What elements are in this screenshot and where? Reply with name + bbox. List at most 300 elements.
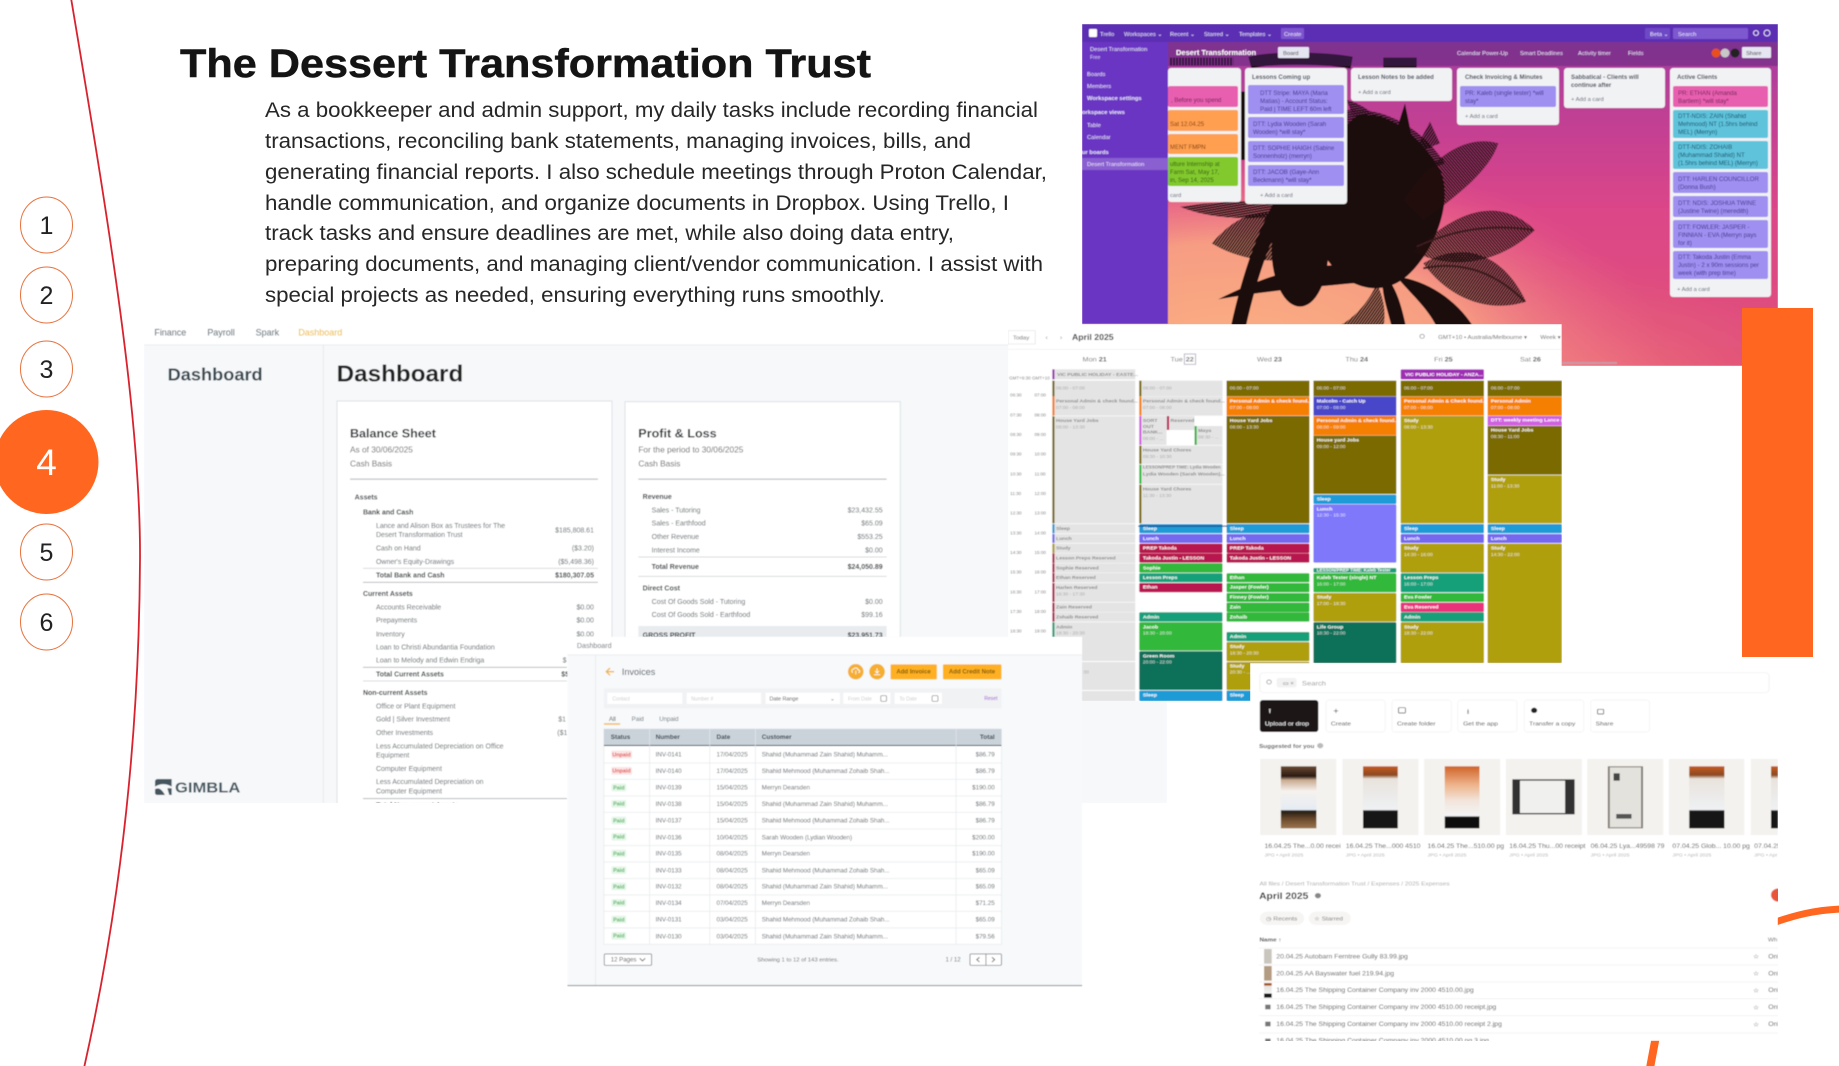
Tuesday column: 09:30 - 10:30 xyxy=(1143,454,1172,459)
Saturday column: Study xyxy=(1491,477,1506,483)
card: balance sheet: Total Bank and Cash xyxy=(376,573,445,580)
Wednesday column: Zohaib xyxy=(1230,614,1247,620)
Tuesday column: Sophie xyxy=(1143,565,1161,571)
list: partial cards: MENT FMPN xyxy=(1170,145,1206,151)
Thursday column: 12:30 - 15:30 xyxy=(1317,513,1346,518)
step 5 xyxy=(20,524,72,580)
dropbox background xyxy=(1250,663,1778,1041)
Thursday column: Kaleb Tester (single) NT xyxy=(1317,575,1377,581)
panel: calendar screenshot xyxy=(1008,324,1565,701)
thumbnail captions xyxy=(1264,843,1781,858)
action buttons: Upload or drop xyxy=(1265,721,1310,728)
list: Sabbatical xyxy=(1564,68,1665,108)
Saturday column: 11:00 - 13:30 xyxy=(1491,483,1520,488)
invoices table: Shahid (Muhammad Zain Shahid) Muhamm... xyxy=(762,801,888,808)
step 5: 5 xyxy=(40,539,53,567)
Thursday column: 08:00 - 09:00 xyxy=(1317,425,1346,429)
invoices table: Date xyxy=(716,734,731,741)
weekday headers: 22 xyxy=(1186,357,1194,363)
card: balance sheet: Total Non-current Assets xyxy=(376,802,459,809)
list: Check Invoicing and Minutes: PR: Kaleb (single tester) *will xyxy=(1465,90,1544,97)
time axis: 17:00 xyxy=(1035,589,1046,594)
Saturday column xyxy=(1488,381,1565,663)
calendar background xyxy=(1008,324,1562,701)
suggested for you heading: Suggested for you xyxy=(1259,744,1315,750)
Tuesday column: House Yard Chores xyxy=(1143,487,1192,493)
card: balance sheet: Gold | Silver Investment xyxy=(376,717,450,724)
Tuesday column xyxy=(1139,381,1225,701)
top navigation bar: Starred ⌄ xyxy=(1204,32,1229,38)
invoices table: Number xyxy=(656,734,680,741)
palm tree silhouette xyxy=(1170,59,1535,327)
list: Sabbatical: + Add a card xyxy=(1571,97,1604,103)
time axis: 19:00 xyxy=(1035,629,1046,634)
Friday column: 18:30 - 22:00 xyxy=(1404,631,1433,636)
workspace sidebar: Workspace settings xyxy=(1087,96,1142,102)
time axis: 07:00 xyxy=(1035,393,1046,398)
invoices background xyxy=(567,637,1082,986)
file rows: 16.04.25 The Shipping Container Company inv 2000 4510.00 receipt.jpg xyxy=(1276,1004,1497,1011)
filter bar: ⌄ xyxy=(830,696,835,702)
list: Active Clients: DTT: NDIS: JOSHUA TWINE xyxy=(1678,200,1756,207)
Thursday column: 09:00 - 12:00 xyxy=(1317,444,1346,449)
Saturday column: Personal Admin xyxy=(1491,399,1531,404)
Tuesday column: 08:30 - ... xyxy=(1198,434,1219,439)
time axis: GMT+10 xyxy=(1032,376,1050,380)
Thursday column: Malcolm - Catch Up xyxy=(1317,399,1366,404)
invoices table: $86.79 xyxy=(976,768,995,775)
table header xyxy=(1259,938,1777,943)
top navigation tabs: Dashboard xyxy=(298,328,342,338)
list: Lessons Coming up: DTT Stripe: MAYA (Maria xyxy=(1260,90,1328,97)
Thursday column xyxy=(1313,381,1399,663)
list: Lessons Coming up: + Add a card xyxy=(1260,193,1293,199)
invoices table: Shahid (Muhammad Zain Shahid) Muhamm... xyxy=(762,933,888,940)
list: Lesson Notes to be added: Lesson Notes to be added xyxy=(1358,74,1434,81)
top navigation tabs: Spark xyxy=(256,328,280,338)
orange accent rectangle xyxy=(1742,308,1813,657)
Thursday column: House yard Jobs xyxy=(1317,438,1359,444)
Thursday column: Study xyxy=(1317,595,1332,601)
invoices table: $200.00 xyxy=(972,834,995,841)
filter bar: From Date xyxy=(848,696,872,702)
Monday column: Lesson Preps Reserved xyxy=(1056,555,1116,561)
invoices table: Merryn Dearsden xyxy=(762,851,810,858)
description text block: track tasks and ensure deadlines are met, while also doing data entry, xyxy=(265,221,954,245)
Friday column: Lunch xyxy=(1404,536,1420,542)
list: Active Clients: FINNIAN - EVA (Merryn pays xyxy=(1678,232,1756,239)
invoices table: INV-0130 xyxy=(656,933,682,940)
Thursday column: Lunch xyxy=(1317,506,1332,512)
invoices table: Paid xyxy=(613,884,625,890)
Wednesday column: House Yard Jobs xyxy=(1230,418,1273,424)
Friday column xyxy=(1401,369,1487,663)
Monday column: Sophie Reserved xyxy=(1056,565,1099,571)
invoices table: INV-0141 xyxy=(656,752,682,759)
search bar: Search xyxy=(1302,680,1326,688)
card: profit and loss: GROSS PROFIT xyxy=(643,632,696,639)
invoices table: Shahid (Muhammad Zain Shahid) Muhamm... xyxy=(762,752,888,759)
Tuesday column: Lydia Wooden (Sarah Wooden)... xyxy=(1143,472,1225,478)
board header bar: Fields xyxy=(1628,51,1644,57)
filter bar: Date Range xyxy=(770,696,798,702)
step 1 xyxy=(20,197,72,253)
top navigation bar: Templates ⌄ xyxy=(1239,32,1272,38)
list: Active Clients: (Muhammad Shahid) NT xyxy=(1678,152,1745,159)
Tuesday column: Lesson Preps xyxy=(1143,575,1178,581)
file rows: 20.04.25 Autobarn Ferntree Gully 83.99.jpg xyxy=(1276,954,1408,960)
thumbnail captions: 16.04.25 The...0.00 recei xyxy=(1264,843,1341,850)
thumbnail captions: JPG • Apr xyxy=(1754,853,1778,858)
Tuesday column: Takoda Justin - LESSON xyxy=(1143,555,1205,561)
decorative orange ring segments xyxy=(1650,909,1839,1066)
Tuesday column: 18:30 - 20:00 xyxy=(1143,631,1172,636)
card: balance sheet: $ xyxy=(563,658,567,665)
card: profit and loss: Cost Of Goods Sold - Tutoring xyxy=(652,599,745,606)
workspace sidebar: Desert Transformation xyxy=(1090,47,1147,53)
Monday column: House Yard Jobs xyxy=(1056,418,1099,424)
Thursday column: Sleep xyxy=(1317,496,1331,502)
invoices table: Unpaid xyxy=(612,769,631,775)
Monday column: VIC PUBLIC HOLIDAY - EASTE... xyxy=(1057,372,1139,378)
thumbnail captions: 16.04.25 The...000 4510 xyxy=(1346,843,1421,850)
Wednesday column: 18:30 - 20:30 xyxy=(1230,650,1259,655)
thumbnail captions: 16.04.25 The...510.00 pg xyxy=(1428,843,1505,850)
invoices table: 08/04/2025 xyxy=(716,884,748,891)
Monday column: Zain Reserved xyxy=(1056,605,1092,611)
Thursday column: Personal Admin & check found... xyxy=(1317,418,1399,424)
card: balance sheet: Office or Plant Equipment xyxy=(376,703,455,710)
invoices table: Shahid Mehmood (Muhammad Zohaib Shah... xyxy=(762,818,890,825)
list: partial cards: ulture Internship at xyxy=(1170,162,1220,168)
filter bar: Reset xyxy=(984,696,998,702)
invoices table: 17/04/2025 xyxy=(716,768,748,775)
Tuesday column: LESSON/PREP TIME: Lydia Wooden xyxy=(1143,465,1221,470)
card: balance sheet: Equipment xyxy=(376,753,409,760)
card: balance sheet: Bank and Cash xyxy=(363,510,413,517)
invoices table: Paid xyxy=(613,917,625,923)
invoices table: Status xyxy=(611,734,631,741)
calendar toolbar: › xyxy=(1060,335,1062,341)
time axis: 12:00 xyxy=(1035,491,1046,496)
workspace sidebar: Table xyxy=(1087,123,1101,129)
Wednesday column: 06:00 - 07:00 xyxy=(1230,386,1259,390)
card: balance sheet: $0.00 xyxy=(576,631,594,638)
filter pills: ☆ Starred xyxy=(1314,916,1343,922)
Thursday column: 06:00 - 07:00 xyxy=(1317,386,1346,390)
step 4 active: 4 xyxy=(36,442,57,483)
action buttons: Share xyxy=(1596,721,1614,728)
list: Active Clients: DTT-NDIS: ZOHAIB xyxy=(1678,144,1732,151)
action buttons: Create xyxy=(1331,721,1352,728)
top navigation bar: Beta ⌄ xyxy=(1650,32,1668,38)
file rows: ☆ xyxy=(1753,971,1759,978)
invoices table: Paid xyxy=(613,868,625,874)
Monday column xyxy=(1052,369,1139,701)
invoices table: Total xyxy=(980,734,995,741)
card: balance sheet: Computer Equipment xyxy=(376,788,442,795)
invoices heading and action buttons: Add Credit Note xyxy=(949,670,996,676)
Saturday column: 08:30 - 11:00 xyxy=(1491,434,1520,439)
Monday column: Study xyxy=(1056,546,1071,552)
top navigation tabs: Finance xyxy=(154,328,186,338)
weekday headers: Tue xyxy=(1171,357,1183,363)
invoices table: INV-0132 xyxy=(656,884,682,891)
list: Lessons Coming up: DTT: JACOB (Gaye-Ann xyxy=(1253,169,1319,176)
Monday column: Lunch xyxy=(1056,536,1072,542)
time axis: 15:30 xyxy=(1010,570,1022,575)
list: Lessons Coming up: Paid | TIME LEFT 60m left xyxy=(1260,106,1332,113)
invoices table: $190.00 xyxy=(972,785,995,792)
filter pills: ◷ Recents xyxy=(1266,916,1297,922)
card: profit and loss: $23,432.55 xyxy=(848,507,883,514)
Tuesday column: PREP Takoda xyxy=(1143,546,1177,552)
description text block: preparing documents, and managing client/vendor communication. I assist with xyxy=(265,252,1043,276)
list: Active Clients: MEL) (Merryn) xyxy=(1678,129,1717,136)
thumbnail captions: JPG • April 2025 xyxy=(1264,853,1304,858)
Friday column: Lesson Preps xyxy=(1404,575,1439,581)
invoices table: INV-0133 xyxy=(656,867,682,874)
card: balance sheet: $0.00 xyxy=(576,604,594,611)
Saturday column: Lunch xyxy=(1491,536,1507,542)
Friday column: Study xyxy=(1404,624,1419,630)
invoices heading and action buttons: Add Invoice xyxy=(896,670,931,676)
board header bar: Activity timer xyxy=(1578,51,1611,57)
Tuesday column: BANK... xyxy=(1143,430,1163,436)
invoices table: $65.09 xyxy=(976,867,995,874)
invoices table: INV-0134 xyxy=(656,900,682,907)
card: profit and loss: Sales - Tutoring xyxy=(652,507,701,514)
folder title: April 2025 xyxy=(1259,892,1309,902)
list: Active Clients: + Add a card xyxy=(1677,287,1710,293)
card: profit and loss: Sales - Earthfood xyxy=(652,521,706,528)
Wednesday column: Finney (Fowler) xyxy=(1230,595,1269,601)
step 4 active xyxy=(0,410,98,514)
Thursday column: 07:00 - 08:00 xyxy=(1317,405,1346,410)
table header: Name ↑ xyxy=(1259,938,1282,943)
file browser list xyxy=(1259,881,1786,1045)
file rows: Onl xyxy=(1768,1021,1779,1028)
Saturday column: 14:30 - 22:00 xyxy=(1491,552,1520,557)
list: partial cards: , Before you spend xyxy=(1171,98,1221,104)
step navigation circles xyxy=(0,197,98,650)
card: balance sheet: Loan to Melody and Edwin Endriga xyxy=(376,658,484,665)
workspace sidebar xyxy=(1082,42,1168,324)
list: Lessons Coming up: Matias) - Account Status: xyxy=(1260,98,1328,105)
time axis: GMT+9:30 xyxy=(1009,376,1031,380)
card: profit and loss: Revenue xyxy=(643,494,672,501)
time axis: 18:30 xyxy=(1010,629,1022,634)
time axis: 13:00 xyxy=(1035,511,1046,516)
calendar toolbar xyxy=(1008,330,1561,344)
Tuesday column: Personal Admin & check found... xyxy=(1143,399,1225,404)
card: profit and loss: $553.25 xyxy=(857,534,883,541)
card: profit and loss: Profit & Loss xyxy=(638,427,717,441)
panel: Trello board screenshot xyxy=(1082,24,1778,366)
status tabs: Unpaid xyxy=(659,717,678,723)
card: balance sheet: Other Investments xyxy=(376,730,434,737)
workspace sidebar: Calendar xyxy=(1087,135,1111,141)
board header bar: Desert Transformation xyxy=(1176,48,1256,57)
card: balance sheet: Accounts Receivable xyxy=(376,604,441,611)
Wednesday column: Sleep xyxy=(1230,693,1244,699)
card: balance sheet: Inventory xyxy=(376,631,405,638)
top navigation bar: Recent ⌄ xyxy=(1170,32,1195,38)
weekday headers: Thu 24 xyxy=(1345,357,1368,363)
calendar toolbar: GMT+10 • Australia/Melbourne ▾ xyxy=(1438,335,1527,341)
Thursday column: Life Group xyxy=(1317,624,1343,630)
card: profit and loss: Direct Cost xyxy=(643,585,681,592)
invoices heading and action buttons: Invoices xyxy=(622,667,656,677)
invoices table: Paid xyxy=(613,802,625,808)
card: profit and loss xyxy=(625,402,900,639)
action buttons: Create folder xyxy=(1397,721,1436,728)
Wednesday column: PREP Takoda xyxy=(1230,546,1264,552)
calendar toolbar: April 2025 xyxy=(1072,332,1114,342)
invoices table: 15/04/2025 xyxy=(716,818,748,825)
file rows: Onl xyxy=(1768,987,1779,994)
weekday headers: Wed 23 xyxy=(1257,357,1282,363)
Friday column: Study xyxy=(1404,418,1419,424)
invoices heading and action buttons xyxy=(606,664,1001,679)
title: The Dessert Transformation Trust xyxy=(180,42,871,86)
card: balance sheet: Owner's Equity-Drawings xyxy=(376,559,455,566)
Tuesday column: Maya xyxy=(1198,428,1212,434)
Wednesday column: Admin xyxy=(1230,634,1246,640)
Monday column: Sleep xyxy=(1056,526,1070,532)
step 3 xyxy=(20,341,72,397)
Monday column: Harlen Reserved xyxy=(1056,585,1098,591)
search bar: ▭ × xyxy=(1283,681,1294,687)
card: profit and loss: Other Revenue xyxy=(652,534,699,541)
invoices table: $86.79 xyxy=(976,818,995,825)
card: balance sheet: Current Assets xyxy=(363,591,413,598)
invoices table: Paid xyxy=(613,835,625,841)
card: balance sheet: Loan to Christi Abundantia Foundation xyxy=(376,644,495,651)
calendar toolbar: Week ▾ xyxy=(1540,335,1561,341)
Monday column: 18:30 - 20:30 xyxy=(1056,631,1085,636)
Saturday column: 06:00 - 07:00 xyxy=(1491,386,1520,390)
invoices table: INV-0139 xyxy=(656,785,682,792)
file rows: 20.04.25 AA Bayswater fuel 219.94.jpg xyxy=(1276,971,1395,977)
invoices table: $65.09 xyxy=(976,917,995,924)
description text block: handle communication, and organize documents in Dropbox. Using Trello, I xyxy=(265,191,1009,215)
search bar xyxy=(1266,678,1326,687)
board header bar: Calendar Power-Up xyxy=(1457,51,1508,57)
list: Lesson Notes to be added xyxy=(1351,68,1452,101)
list: Active Clients: Bartlem) *will stay* xyxy=(1678,98,1729,105)
list: Active Clients: week (with prep time) xyxy=(1677,270,1736,277)
filter bar xyxy=(604,688,1001,708)
file rows: ☆ xyxy=(1753,954,1759,961)
main dashboard heading: Dashboard xyxy=(337,361,463,387)
time axis: 10:00 xyxy=(1035,452,1046,457)
Tuesday column: 08:00 - ... xyxy=(1143,436,1164,441)
invoices table: Shahid Mehmood (Muhammad Zohaib Shah... xyxy=(762,768,890,775)
invoices table: 03/04/2025 xyxy=(716,933,748,940)
invoices table: Paid xyxy=(613,934,625,940)
dashboard background xyxy=(144,345,1167,803)
file rows: 16.04.25 The Shipping Container Company inv 2000 4510.00.jpg xyxy=(1276,987,1474,994)
list: Lessons Coming up: Beckmann) *will stay* xyxy=(1253,177,1312,184)
invoices table: 08/04/2025 xyxy=(716,851,748,858)
invoices table: Paid xyxy=(613,818,625,824)
file rows: 16.04.25 The Shipping Container Company inv 2000 4510.00 receipt 2.jpg xyxy=(1276,1021,1502,1028)
invoices table: INV-0138 xyxy=(656,801,682,808)
invoices table: Sarah Wooden (Lydian Wooden) xyxy=(762,834,852,841)
sidebar with logo xyxy=(155,345,324,805)
list: Lessons Coming up: Wooden) *will stay* xyxy=(1253,129,1306,136)
time axis: 16:30 xyxy=(1010,589,1022,594)
panel: Dropbox screenshot xyxy=(1250,663,1786,1045)
thumbnail captions: JPG • April 2025 xyxy=(1346,853,1385,858)
top navigation bar: Trello xyxy=(1100,32,1114,38)
Friday column: 08:00 - 13:30 xyxy=(1404,425,1433,429)
invoices table: 07/04/2025 xyxy=(716,900,748,907)
time axis: 11:30 xyxy=(1010,491,1022,496)
thumbnail captions: JPG • April 2025 xyxy=(1509,853,1548,858)
calendar toolbar: ‹ xyxy=(1045,335,1048,341)
weekday headers xyxy=(1083,354,1541,364)
card: profit and loss: Cash Basis xyxy=(638,459,680,469)
Tuesday column: Reserved xyxy=(1171,418,1194,424)
card: profit and loss: $23,951.73 xyxy=(848,632,883,639)
list: Active Clients: Active Clients xyxy=(1677,74,1718,81)
invoices table: 03/04/2025 xyxy=(716,917,748,924)
invoices table: 10/04/2025 xyxy=(716,834,748,841)
weekday headers: Mon 21 xyxy=(1083,357,1107,363)
card: profit and loss: $0.00 xyxy=(865,599,883,606)
workspace sidebar: ur boards xyxy=(1082,150,1109,156)
workspace sidebar: orkspace views xyxy=(1082,110,1125,116)
card: balance sheet: Cash Basis xyxy=(350,459,392,469)
filter bar: To Date xyxy=(899,696,917,702)
Friday column: VIC PUBLIC HOLIDAY - ANZA... xyxy=(1405,372,1484,378)
invoices table: $86.79 xyxy=(976,752,995,759)
list: Active Clients: (1.5hrs behind MEL) (Merryn) xyxy=(1678,160,1758,167)
Wednesday column: Lunch xyxy=(1230,536,1246,542)
action buttons xyxy=(1260,700,1650,732)
file rows xyxy=(1259,948,1779,1045)
Tuesday column: 20:00 - 22:00 xyxy=(1143,660,1172,665)
list: Active Clients: Mehmood) NT (1.5hrs behind xyxy=(1678,121,1757,128)
card: balance sheet: ($3.20) xyxy=(572,545,594,552)
card: balance sheet: Prepayments xyxy=(376,618,418,625)
list: Lessons Coming up: Sonnenholz) (merryn) xyxy=(1253,153,1312,160)
card: balance sheet: $180,307.05 xyxy=(555,573,594,580)
status tabs xyxy=(604,717,678,725)
Tuesday column: Sleep xyxy=(1143,526,1157,532)
time axis: 13:30 xyxy=(1010,530,1022,535)
Monday column: Personal Admin & check found... xyxy=(1056,399,1139,404)
file rows: 16.04.25 The Shipping Container Company inv 2000 4510.00 pg 3.jpg xyxy=(1276,1038,1489,1045)
list: Active Clients: for it) xyxy=(1678,240,1692,247)
Friday column: Study xyxy=(1404,546,1419,552)
workspace sidebar: Members xyxy=(1087,84,1111,90)
breadcrumb header: Dashboard xyxy=(577,643,612,650)
file rows: Onl xyxy=(1768,954,1779,960)
time axis: 17:30 xyxy=(1010,609,1022,614)
invoices table: Shahid (Muhammad Zain Shahid) Muhamm... xyxy=(762,884,888,891)
Thursday column: 18:30 - 22:00 xyxy=(1317,631,1346,636)
pagination xyxy=(604,954,1001,965)
invoices table: $79.56 xyxy=(976,933,995,940)
card: profit and loss: $65.09 xyxy=(861,521,883,528)
Wednesday column: Personal Admin & check found... xyxy=(1230,399,1312,404)
Wednesday column: Zain xyxy=(1230,604,1241,610)
decorative red curve xyxy=(71,0,140,1066)
pagination: Showing 1 to 12 of 143 entries. xyxy=(757,958,839,964)
